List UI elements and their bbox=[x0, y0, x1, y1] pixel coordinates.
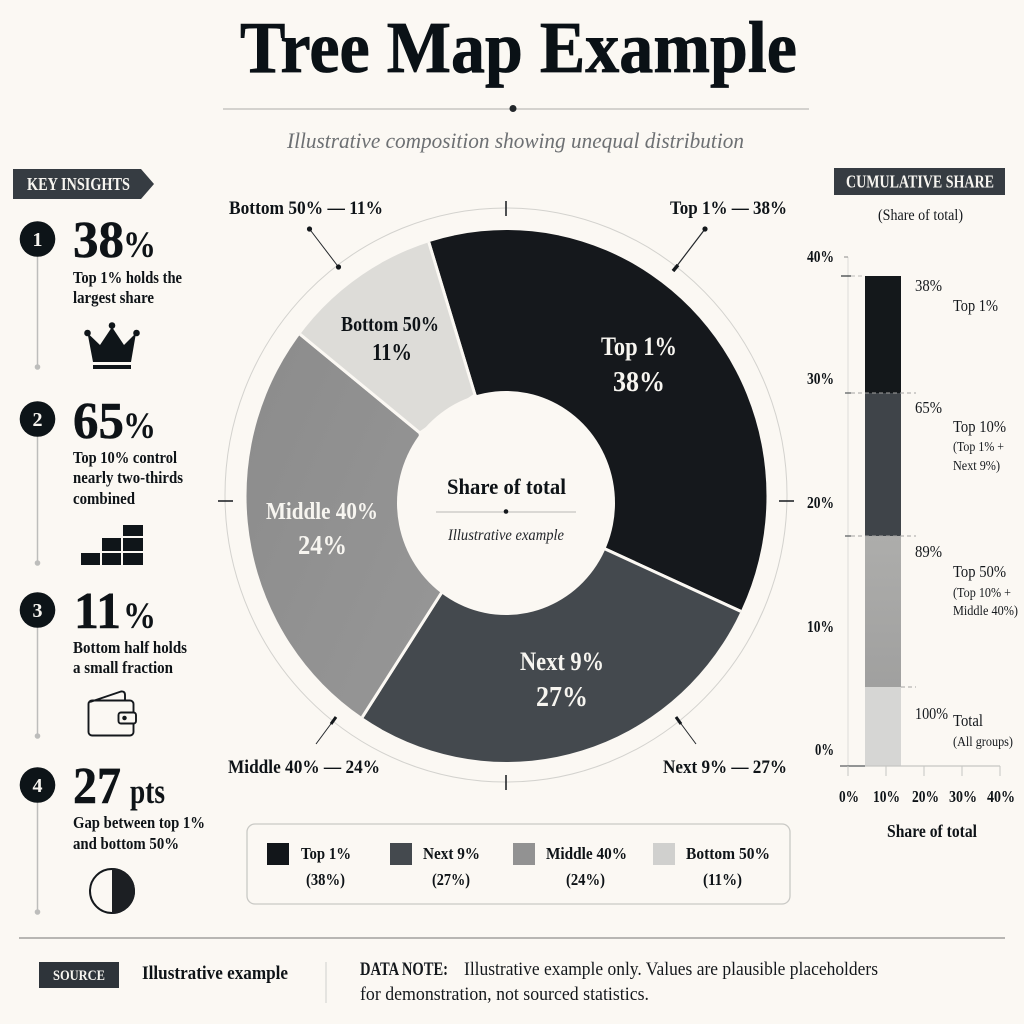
bar label: top 50%: (Top 10% + bbox=[953, 585, 1011, 600]
icon: stepped bars bbox=[81, 525, 143, 565]
callout: next 9% bbox=[663, 717, 787, 778]
donut centre label: Illustrative example bbox=[447, 527, 564, 544]
insight 4: 27 bbox=[73, 758, 121, 815]
label: bottom 50% segment: Bottom 50% bbox=[341, 312, 439, 336]
segment: next 9% bbox=[362, 548, 742, 762]
bar label: total bbox=[915, 704, 1013, 749]
insight 3: Bottom half holds bbox=[73, 638, 188, 657]
insight 2: 2 bbox=[32, 409, 42, 431]
panel: legend bbox=[247, 824, 790, 904]
bar label: total: (All groups) bbox=[953, 734, 1013, 749]
source text: Illustrative example bbox=[142, 963, 288, 984]
insight 1: Top 1% holds the bbox=[73, 268, 182, 287]
legend item: middle 40% bbox=[513, 843, 627, 889]
outer ring and ticks bbox=[218, 201, 794, 790]
legend item: next 9%: Next 9% bbox=[423, 844, 480, 863]
source tag bbox=[39, 962, 119, 988]
bar label: top 10%: (Top 1% + bbox=[953, 439, 1004, 454]
legend item: bottom 50%: Bottom 50% bbox=[686, 844, 770, 863]
label: bottom 50% segment: 11% bbox=[372, 340, 412, 366]
bar label: top 10%: Top 10% bbox=[953, 417, 1006, 436]
icon: crown bbox=[84, 322, 140, 369]
insight 4: 4 bbox=[32, 775, 42, 797]
label: top 1% segment: 38% bbox=[613, 366, 665, 398]
insight 2: % bbox=[123, 406, 156, 447]
label: top 1% segment bbox=[601, 332, 677, 398]
bar label: top 1% bbox=[915, 276, 998, 315]
key insights heading tag: KEY INSIGHTS bbox=[27, 174, 130, 194]
legend item: next 9% bbox=[390, 843, 480, 889]
y axis: 10% bbox=[807, 617, 834, 636]
callout: next 9%: Next 9% — 27% bbox=[663, 757, 787, 778]
callout: middle 40% bbox=[228, 717, 380, 778]
label: next 9% segment: 27% bbox=[536, 681, 588, 713]
insight 2: Top 10% control bbox=[73, 448, 177, 467]
insight 1: 38 bbox=[73, 212, 124, 269]
y axis: 0% bbox=[815, 740, 834, 759]
x axis: 40% bbox=[987, 787, 1015, 806]
insight 3: a small fraction bbox=[73, 658, 173, 677]
segment: middle 40% bbox=[246, 334, 442, 718]
insight 2: combined bbox=[73, 489, 135, 508]
bar label: top 50% bbox=[915, 542, 1018, 618]
bar label: top 50%: 89% bbox=[915, 542, 942, 561]
insight 4: Gap between top 1% bbox=[73, 813, 205, 832]
insight 2: 65 bbox=[73, 393, 124, 450]
legend item: top 1%: (38%) bbox=[306, 870, 345, 889]
x axis: 20% bbox=[912, 787, 939, 806]
panel: key insights bbox=[13, 169, 208, 915]
x axis title: Share of total bbox=[887, 821, 977, 841]
y axis: 20% bbox=[807, 493, 834, 512]
insight 1 bbox=[20, 212, 182, 370]
bar label: top 10%: 65% bbox=[915, 398, 942, 417]
insight 1: largest share bbox=[73, 288, 154, 307]
insight 1: % bbox=[123, 225, 156, 266]
label: middle 40% segment: Middle 40% bbox=[266, 499, 378, 525]
bar label: top 1%: Top 1% bbox=[953, 296, 998, 315]
insight 1: 1 bbox=[32, 229, 42, 251]
label: middle 40% segment: 24% bbox=[298, 530, 347, 560]
bar label: total: Total bbox=[953, 711, 983, 730]
x axis: 30% bbox=[949, 787, 977, 806]
data note: for demonstration, not sourced statistics. bbox=[360, 985, 649, 1005]
donut centre label: Share of total bbox=[447, 474, 566, 499]
insight 4: pts bbox=[130, 772, 165, 811]
insight 4: and bottom 50% bbox=[73, 834, 179, 853]
label: next 9% segment: Next 9% bbox=[520, 647, 604, 676]
key insights heading tag bbox=[13, 169, 154, 199]
callout: middle 40%: Middle 40% — 24% bbox=[228, 757, 380, 778]
label: bottom 50% segment bbox=[341, 312, 439, 366]
panel: donut chart bbox=[200, 190, 800, 800]
callout: bottom 50% bbox=[229, 198, 383, 270]
legend item: middle 40%: (24%) bbox=[566, 870, 605, 889]
insight 3 bbox=[20, 583, 188, 739]
title: Tree Map Example bbox=[240, 7, 797, 88]
y axis bbox=[807, 247, 851, 766]
label: middle 40% segment bbox=[266, 499, 378, 560]
x axis: 10% bbox=[873, 787, 900, 806]
legend item: top 1%: Top 1% bbox=[301, 844, 351, 863]
callout: bottom 50%: Bottom 50% — 11% bbox=[229, 198, 383, 219]
legend item: top 1% bbox=[267, 843, 351, 889]
insight 3: % bbox=[123, 596, 156, 637]
donut centre label bbox=[397, 391, 615, 615]
data note bbox=[360, 960, 878, 1005]
stacked bar bbox=[851, 276, 916, 766]
callout: top 1%: Top 1% — 38% bbox=[670, 198, 787, 219]
bar label: top 10%: Next 9%) bbox=[953, 458, 1000, 473]
legend item: bottom 50% bbox=[653, 843, 770, 889]
bar label: top 50%: Middle 40%) bbox=[953, 603, 1018, 618]
subtitle: Illustrative composition showing unequal distribution bbox=[286, 128, 744, 153]
cumulative share heading bbox=[834, 168, 1005, 195]
insight 3: 11 bbox=[74, 583, 121, 640]
chart subtitle: (Share of total) bbox=[878, 207, 963, 224]
icon: half circle bbox=[90, 868, 135, 914]
data note: DATA NOTE: bbox=[360, 960, 448, 980]
segment: bottom 50% bbox=[300, 242, 476, 434]
insight 2: nearly two-thirds bbox=[73, 468, 184, 487]
icon: wallet bbox=[88, 691, 136, 736]
y axis: 30% bbox=[807, 369, 834, 388]
insight 4 bbox=[20, 758, 205, 915]
data note: Illustrative example only. Values are plausible placeholders bbox=[464, 960, 878, 980]
bar label: total: 100% bbox=[915, 704, 948, 723]
x axis: 0% bbox=[839, 787, 859, 806]
label: top 1% segment: Top 1% bbox=[601, 332, 677, 361]
bar label: top 1%: 38% bbox=[915, 276, 942, 295]
y axis: 40% bbox=[807, 247, 834, 266]
panel: cumulative share chart bbox=[805, 168, 1020, 843]
insight 3: 3 bbox=[32, 600, 42, 622]
legend item: bottom 50%: (11%) bbox=[703, 870, 742, 889]
bar label: top 50%: Top 50% bbox=[953, 562, 1006, 581]
label: next 9% segment bbox=[520, 647, 604, 713]
insight 2 bbox=[20, 393, 184, 566]
bar label: top 10% bbox=[915, 398, 1006, 473]
x axis bbox=[839, 766, 1015, 806]
legend item: next 9%: (27%) bbox=[432, 870, 470, 889]
segment: top 1% bbox=[428, 230, 766, 612]
legend item: middle 40%: Middle 40% bbox=[546, 844, 627, 863]
source tag: SOURCE bbox=[53, 968, 105, 984]
callout: top 1% bbox=[670, 198, 787, 271]
